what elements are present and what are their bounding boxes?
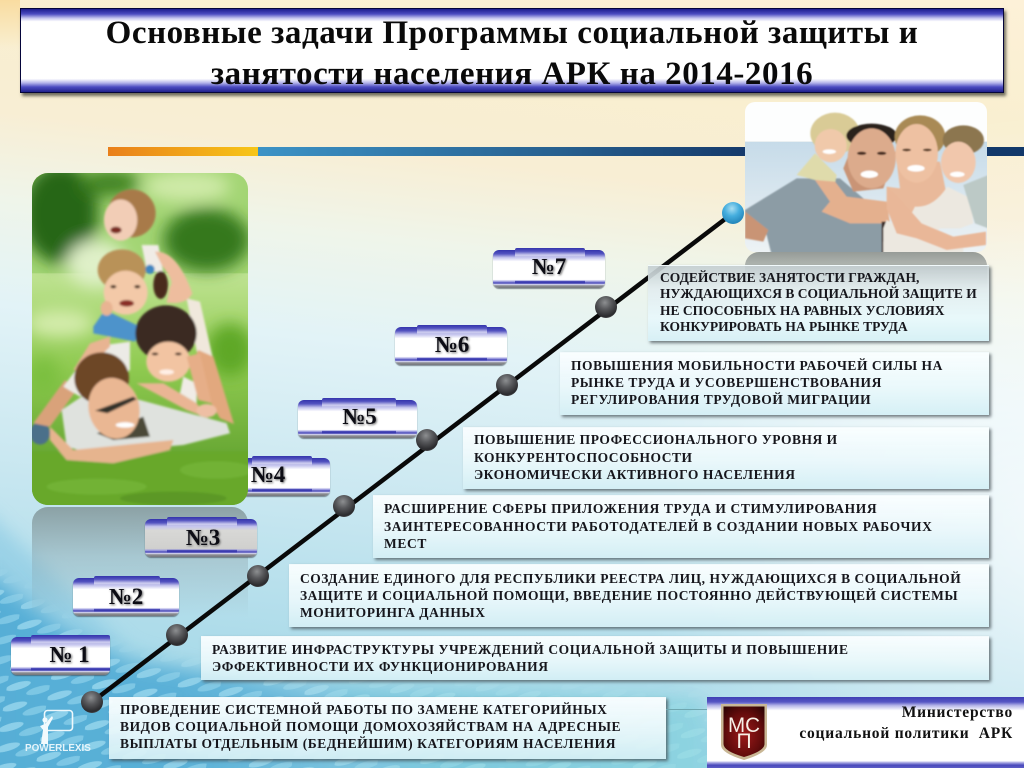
task box 5: КОНКУРЕНТОСПОСОБНОСТИ xyxy=(474,450,693,464)
title banner xyxy=(20,8,1004,93)
badge №5 xyxy=(298,400,417,438)
task box 5: ЭКОНОМИЧЕСКИ АКТИВНОГО НАСЕЛЕНИЯ xyxy=(474,467,795,482)
background graphics xyxy=(0,0,707,768)
icon: ministry shield xyxy=(721,704,767,760)
badge №3: №3 xyxy=(186,525,220,550)
logo wordmark: POWERLEXIS xyxy=(25,743,91,754)
node 7 xyxy=(595,296,617,318)
task box 6: ПОВЫШЕНИЯ МОБИЛЬНОСТИ РАБОЧЕЙ СИЛЫ НА xyxy=(571,358,943,373)
badge №5: №5 xyxy=(342,404,377,429)
badge №4 xyxy=(232,458,330,496)
task box 6 xyxy=(560,352,989,415)
badge №7 xyxy=(493,250,605,288)
task box 2: ЭФФЕКТИВНОСТИ ИХ ФУНКЦИОНИРОВАНИЯ xyxy=(212,659,549,674)
connector line xyxy=(666,709,707,710)
badge №3 xyxy=(145,519,257,557)
node 6 xyxy=(496,374,518,396)
task box 7: НЕ СПОСОБНЫХ НА РАВНЫХ УСЛОВИЯХ xyxy=(660,303,945,318)
ministry name: Министерство социальной политики АРК xyxy=(799,704,1013,742)
task box 1: ПРОВЕДЕНИЕ СИСТЕМНОЙ РАБОТЫ ПО ЗАМЕНЕ КАТЕГОРИЙНЫХ xyxy=(120,702,607,717)
title banner: занятости населения АРК на 2014-2016 xyxy=(211,56,813,92)
jeans and leg xyxy=(30,422,50,445)
accent bar xyxy=(108,147,1024,156)
end node xyxy=(722,202,744,224)
face 1 xyxy=(104,199,137,241)
task box 3: МОНИТОРИНГА ДАННЫХ xyxy=(300,605,485,620)
task box 2 xyxy=(201,636,989,680)
girl top body xyxy=(142,245,163,273)
right photo: family portrait xyxy=(745,102,987,252)
task box 5: ПОВЫШЕНИЕ ПРОФЕССИОНАЛЬНОГО УРОВНЯ И xyxy=(474,432,838,447)
task box 7: СОДЕЙСТВИЕ ЗАНЯТОСТИ ГРАЖДАН, xyxy=(660,270,919,285)
badge №4: №4 xyxy=(251,462,285,487)
woman xyxy=(880,220,886,252)
icon: ministry shield: МС xyxy=(728,714,760,737)
node 5 xyxy=(416,429,438,451)
badge №6: №6 xyxy=(435,332,469,357)
task box 7: КОНКУРИРОВАТЬ НА РЫНКЕ ТРУДА xyxy=(660,319,908,334)
powerlexis logo xyxy=(25,710,91,754)
title banner: Основные задачи Программы социальной защиты и xyxy=(106,15,918,51)
node 4 xyxy=(333,495,355,517)
badge №6 xyxy=(395,327,507,365)
girl 2 xyxy=(153,271,168,299)
hair 1 xyxy=(108,189,156,237)
ministry panel xyxy=(707,697,1024,768)
task box 4 xyxy=(373,495,989,558)
right photo reflection xyxy=(745,252,987,298)
task box 1: ВИДОВ СОЦИАЛЬНОЙ ПОМОЩИ ДОМОХОЗЯЙСТВАМ НА АДРЕСНЫЕ xyxy=(120,719,621,734)
task box 3: СОЗДАНИЕ ЕДИНОГО ДЛЯ РЕСПУБЛИКИ РЕЕСТРА ЛИЦ, НУЖДАЮЩИХСЯ В СОЦИАЛЬНОЙ xyxy=(300,571,961,586)
grass foreground xyxy=(30,452,250,510)
boy arm xyxy=(815,180,890,223)
task box 2: РАЗВИТИЕ ИНФРАСТРУКТУРЫ УЧРЕЖДЕНИЙ СОЦИАЛЬНОЙ ЗАЩИТЫ И ПОВЫШЕНИЕ xyxy=(212,642,849,657)
badge №1 xyxy=(11,637,110,675)
task box 1: ВЫПЛАТЫ ОТДЕЛЬНЫМ (БЕДНЕЙШИМ) КАТЕГОРИЯМ НАСЕЛЕНИЯ xyxy=(120,736,616,751)
task box 3 xyxy=(289,564,989,627)
node 2 xyxy=(166,624,188,646)
task box 4: РАСШИРЕНИЕ СФЕРЫ ПРИЛОЖЕНИЯ ТРУДА И СТИМУЛИРОВАНИЯ xyxy=(384,501,877,516)
task box 6: РЫНКЕ ТРУДА И УСОВЕРШЕНСТВОВАНИЯ xyxy=(571,375,882,390)
task box 5 xyxy=(463,427,989,489)
left photo: family on grass xyxy=(32,173,248,505)
badge №2: №2 xyxy=(109,584,143,609)
node 3 xyxy=(247,565,269,587)
node 1 xyxy=(81,691,103,713)
left photo reflection xyxy=(32,507,248,617)
task box 4: ЗАИНТЕРЕСОВАННОСТИ РАБОТОДАТЕЛЕЙ В СОЗДАНИИ НОВЫХ РАБОЧИХ xyxy=(384,518,932,534)
boy xyxy=(810,113,860,154)
girl xyxy=(963,175,988,228)
task box 7 xyxy=(648,265,989,341)
badge №2 xyxy=(73,578,179,616)
man xyxy=(62,393,230,453)
task box 6: РЕГУЛИРОВАНИЯ ТРУДОВОЙ МИГРАЦИИ xyxy=(571,392,871,407)
icon: presenter at screen xyxy=(40,710,74,744)
task box 7: НУЖДАЮЩИХСЯ В СОЦИАЛЬНОЙ ЗАЩИТЕ И xyxy=(660,286,977,301)
badge №1: № 1 xyxy=(49,642,90,667)
man shirt xyxy=(745,178,887,255)
icon: ministry shield: П xyxy=(736,730,752,753)
boy xyxy=(180,377,197,403)
task box 4: МЕСТ xyxy=(384,536,427,551)
man head xyxy=(846,122,896,144)
diagonal line xyxy=(92,213,733,702)
task box 1 xyxy=(109,697,666,759)
badge №7: №7 xyxy=(532,254,566,279)
task box 3: ЗАЩИТЕ И СОЦИАЛЬНОЙ ПОМОЩИ, ВВЕДЕНИЕ ПОСТОЯННО ДЕЙСТВУЮЩЕЙ СИСТЕМЫ xyxy=(300,588,958,603)
